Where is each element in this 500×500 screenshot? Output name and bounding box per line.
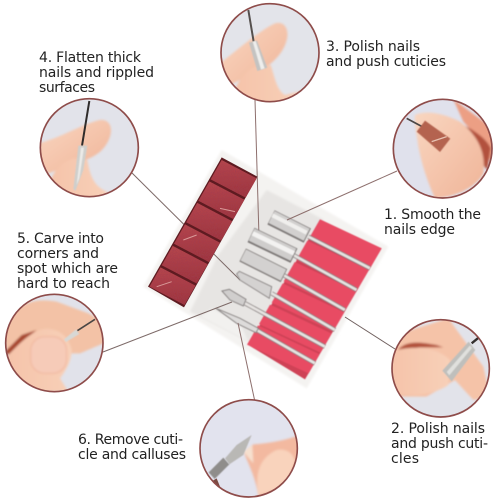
bit 3: diamond barrel xyxy=(243,255,345,310)
circle photo: step 1 xyxy=(393,99,495,198)
connector line: step 1 xyxy=(287,171,397,220)
bit 2: smooth barrel xyxy=(251,233,357,290)
pink foam blocks xyxy=(247,219,382,379)
caption: step 3: 3. Polish nails xyxy=(326,39,420,55)
tray base xyxy=(143,150,388,388)
caption: step 6 xyxy=(78,432,186,463)
caption: step 1: nails edge xyxy=(384,222,455,238)
caption: step 4: 4. Flatten thick xyxy=(39,50,142,66)
connector line: step 5 xyxy=(103,302,232,352)
bit 4: tapered cone xyxy=(237,271,335,330)
bit 1: knurled barrel xyxy=(271,215,370,268)
connector line: step 2 xyxy=(345,317,395,349)
circle photo: step 4 xyxy=(38,99,138,202)
caption: step 6: cle and calluses xyxy=(78,447,186,463)
circle photo: step 6 xyxy=(200,400,300,497)
connector line: step 6 xyxy=(238,323,255,402)
connector line: step 3 xyxy=(255,100,259,237)
caption: step 1 xyxy=(384,207,481,238)
caption: step 2 xyxy=(391,421,488,467)
circle photo: step 2 xyxy=(390,318,490,417)
caption: step 5 xyxy=(17,231,118,292)
bit 6: needle xyxy=(216,308,315,363)
connector line: step 4 xyxy=(128,169,240,280)
bit 5: flame xyxy=(222,289,325,347)
caption: step 4: nails and rippled xyxy=(39,65,154,81)
caption: step 4: surfaces xyxy=(39,80,95,96)
sanding caps strip xyxy=(148,157,257,307)
drill bits xyxy=(216,215,370,363)
caption: step 1: 1. Smooth the xyxy=(384,207,481,223)
caption: step 3 xyxy=(326,39,446,70)
circle photo: step 3 xyxy=(220,4,319,107)
caption: step 2: cles xyxy=(391,451,419,467)
caption: step 5: hard to reach xyxy=(17,276,110,292)
caption: step 2: 2. Polish nails xyxy=(391,421,485,437)
caption: step 6: 6. Remove cuti- xyxy=(78,432,183,448)
caption: step 3: and push cuticies xyxy=(326,54,446,70)
caption: step 5: spot which are xyxy=(17,261,118,277)
circle photo: step 5 xyxy=(3,294,103,392)
caption: step 5: corners and xyxy=(17,246,99,262)
caption: step 4 xyxy=(39,50,154,96)
caption: step 2: and push cuti- xyxy=(391,436,488,452)
caption: step 5: 5. Carve into xyxy=(17,231,104,247)
